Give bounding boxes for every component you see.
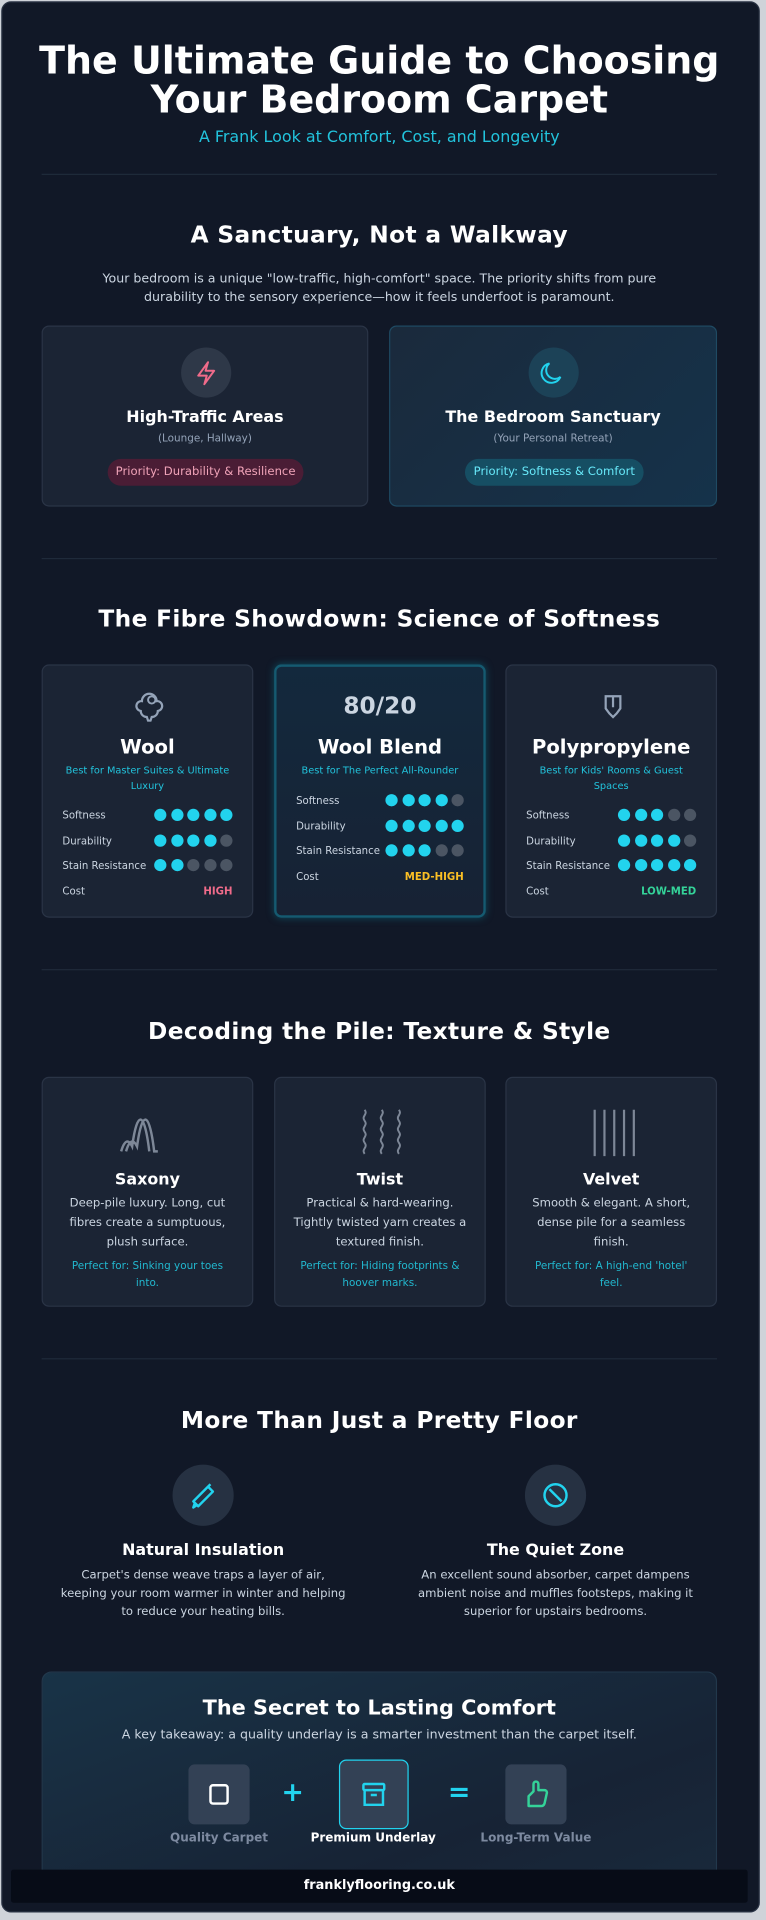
icon: 80/20: 80/20 [343, 693, 417, 719]
panel: velvet [505, 1077, 717, 1307]
panel: saxony [42, 1077, 253, 1307]
panel: sanctuary: (Your Personal Retreat) [493, 433, 613, 445]
icon: premium underlay [339, 1760, 409, 1829]
panel: saxony: Perfect for: Sinking your toes into. [72, 1260, 223, 1290]
panel: polypropylene: Best for Kids' Rooms & Guest Spaces [540, 765, 683, 792]
panel: twist: Twist [357, 1171, 403, 1189]
feature: quiet: An excellent sound absorber, carpet dampens ambient noise and muffles footsteps, making it superior for upstairs bedrooms. [418, 1569, 693, 1619]
icon: twist lines [362, 1109, 401, 1154]
footer: franklyflooring.co.uk [304, 1878, 455, 1893]
panel: secret to comfort [42, 1671, 717, 1879]
panel: polypropylene: Stain Resistance [526, 859, 610, 871]
panel: secret to comfort: Premium Underlay [311, 1832, 436, 1845]
panel: polypropylene: Softness [526, 809, 569, 821]
icon: moon [529, 348, 579, 398]
panel: wool: HIGH [203, 885, 232, 897]
icon: saxony waves [120, 1118, 158, 1153]
panel: velvet: Smooth & elegant. A short, dense pile for a seamless finish. [532, 1197, 690, 1249]
panel: wool: Softness [62, 809, 106, 821]
heading: fibre: The Fibre Showdown: Science of Softness [98, 606, 660, 633]
heading: sanctuary: A Sanctuary, Not a Walkway [191, 221, 568, 248]
panel: secret to comfort: The Secret to Lasting Comfort [203, 1696, 556, 1720]
panel: polypropylene [505, 664, 717, 918]
panel: wool blend: Softness [296, 794, 339, 806]
title: Your Bedroom Carpet [151, 78, 608, 122]
panel: velvet: Perfect for: A high-end 'hotel' feel. [535, 1260, 687, 1290]
title [39, 39, 719, 122]
panel: velvet: Velvet [583, 1171, 639, 1189]
panel: twist [274, 1077, 486, 1307]
panel: secret to comfort: Long-Term Value [480, 1832, 591, 1845]
pill [108, 459, 303, 486]
panel: polypropylene: LOW-MED [641, 885, 696, 897]
panel: high-traffic: (Lounge, Hallway) [158, 433, 252, 445]
title: The Ultimate Guide to Choosing [39, 39, 719, 83]
panel: secret to comfort: + [281, 1778, 304, 1808]
panel: polypropylene: Polypropylene [532, 735, 690, 759]
icon: insulation [173, 1465, 234, 1526]
panel: high-traffic [42, 325, 368, 507]
icon: tooth [604, 695, 622, 718]
panel: sanctuary: The Bedroom Sanctuary [445, 409, 661, 427]
footer [11, 1870, 748, 1903]
panel: wool [42, 664, 253, 918]
panel: wool blend: Stain Resistance [296, 844, 380, 857]
panel: saxony: Deep-pile luxury. Long, cut fibres create a sumptuous, plush surface. [70, 1197, 225, 1249]
panel: wool: Best for Master Suites & Ultimate Luxury [66, 765, 229, 792]
pill: Priority: Durability & Resilience [116, 465, 295, 478]
panel: wool blend: MED-HIGH [405, 870, 464, 882]
panel: polypropylene: Cost [526, 885, 549, 897]
panel: twist: Practical & hard-wearing. Tightly twisted yarn creates a textured finish. [294, 1197, 466, 1249]
panel: wool blend: Durability [296, 820, 346, 832]
feature: insulation: keeping your room warmer in winter and helping [61, 1587, 345, 1600]
subtitle: A Frank Look at Comfort, Cost, and Longevity [199, 128, 560, 147]
panel: wool: Cost [62, 885, 85, 897]
icon: long-term value [505, 1764, 567, 1824]
panel: wool blend [274, 664, 486, 918]
feature: insulation: to reduce your heating bills. [121, 1605, 285, 1619]
panel: wool blend: Wool Blend [318, 735, 442, 759]
heading: pile: Decoding the Pile: Texture & Style [148, 1018, 611, 1045]
icon: lightning [181, 348, 231, 398]
icon: velvet lines [594, 1110, 635, 1156]
panel: saxony: Saxony [115, 1171, 180, 1189]
icon: sheep [135, 692, 164, 722]
feature: insulation [61, 1464, 345, 1619]
panel: polypropylene: Durability [526, 834, 576, 847]
panel: sanctuary [389, 325, 717, 507]
pill [465, 459, 644, 486]
panel: wool: Durability [62, 834, 112, 847]
feature: quiet: The Quiet Zone [487, 1542, 624, 1560]
feature: insulation: Natural Insulation [122, 1542, 284, 1560]
feature: quiet [418, 1464, 693, 1619]
heading: more: More Than Just a Pretty Floor [181, 1407, 578, 1434]
panel: wool blend: Best for The Perfect All-Rounder [302, 765, 458, 776]
feature: insulation: Carpet's dense weave traps a layer of air, [81, 1569, 325, 1582]
icon: quality carpet [188, 1764, 250, 1824]
panel: secret to comfort: A key takeaway: a quality underlay is a smarter investment than the carpet itself. [122, 1728, 637, 1742]
panel: secret to comfort: Quality Carpet [170, 1832, 268, 1845]
icon: no sound [525, 1465, 586, 1526]
panel: high-traffic: High-Traffic Areas [126, 409, 284, 427]
panel: twist: Perfect for: Hiding footprints & hoover marks. [300, 1260, 459, 1290]
intro text: Your bedroom is a unique "low-traffic, high-comfort" space. The priority shifts from pure durability to the sensory experience—how it feels underfoot is paramount. [102, 272, 656, 305]
pill: Priority: Softness & Comfort [474, 465, 635, 478]
panel: wool blend: Cost [296, 870, 319, 882]
panel: secret to comfort: = [448, 1778, 470, 1808]
panel: wool: Stain Resistance [62, 859, 146, 871]
panel: wool: Wool [120, 735, 175, 759]
